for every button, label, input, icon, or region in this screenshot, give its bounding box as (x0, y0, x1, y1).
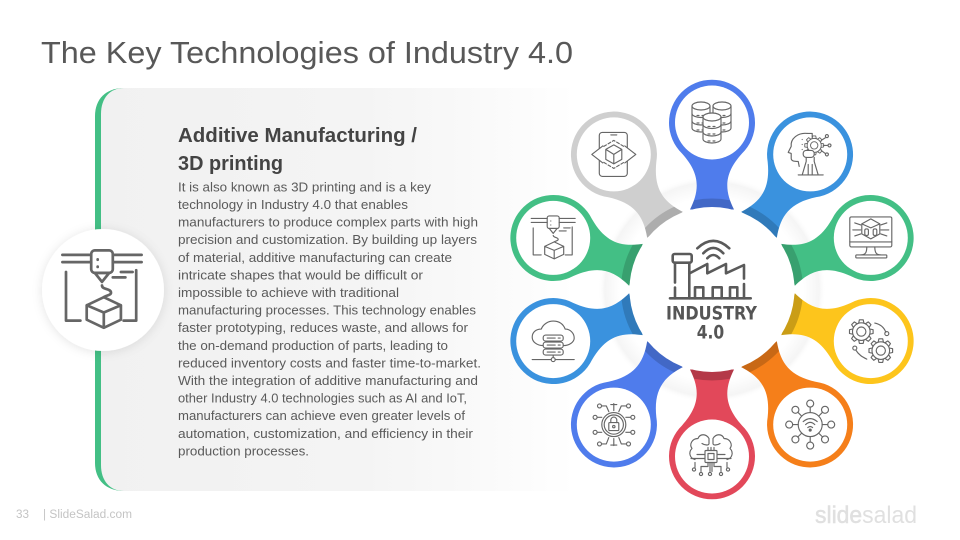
petal: digital twin (781, 195, 914, 286)
petal: automation gears (781, 293, 914, 384)
centre hub disc (630, 207, 794, 372)
panel body text: technology in Industry 4.0 that enables (178, 198, 408, 212)
petal: internet of things (741, 341, 854, 468)
panel body text: manufacturing processes. This technology enables (178, 304, 476, 318)
panel body text: of material, additive manufacturing can create (178, 251, 452, 265)
panel body text: reduced inventory costs and faster time-to-market. (178, 356, 481, 370)
panel grey body (101, 88, 575, 491)
icon: gears with process arrows (850, 320, 893, 362)
icon badge: 3D printer (42, 229, 164, 351)
petal: machine learning (669, 370, 755, 499)
icon: cloud server (532, 321, 574, 362)
icon: monitor with cube (850, 217, 892, 258)
petal: artificial intelligence (741, 112, 854, 238)
icon: databases (692, 102, 731, 143)
petal: cybersecurity (570, 341, 683, 468)
panel body text: production processes. (178, 444, 309, 458)
panel body text (178, 180, 481, 458)
hub label: INDUSTRY 4.0: 4.0 (697, 322, 724, 344)
panel body text: precision and customization. By building up layers (178, 233, 477, 247)
panel body text: other Industry 4.0 technologies such as AI and IoT, (178, 392, 467, 406)
panel body text: intricate shapes that would be difficult or (178, 268, 423, 282)
panel body text: impossible to achieve with traditional (178, 286, 399, 300)
icon: phone augmented reality cube (592, 132, 636, 176)
title: The Key Technologies of Industry 4.0 (41, 35, 573, 70)
panel green edge (95, 88, 124, 491)
petal inner white discs (516, 86, 908, 494)
panel body text: manufacturers can achieve even greater levels of (178, 409, 466, 423)
radial diagram: ten coloured petals (499, 80, 925, 499)
panel body text: automation, customization, and efficiency in their (178, 427, 473, 441)
footer: page number and site: 33 (16, 509, 29, 521)
icon: brain chip (690, 435, 732, 476)
panel heading: Additive Manufacturing / (178, 125, 417, 147)
petal: additive manufacturing (510, 195, 643, 286)
hub label: INDUSTRY 4.0 (666, 304, 758, 344)
panel body text: With the integration of additive manufacturing and (178, 374, 478, 388)
hub label: INDUSTRY 4.0: INDUSTRY (666, 304, 758, 324)
icon: wireless network hub (786, 400, 835, 449)
panel body text: the on-demand production of parts, leading to (178, 339, 448, 353)
panel: additive manufacturing description (95, 88, 575, 491)
petal: cloud computing (510, 293, 643, 384)
icon: AI head with gear (788, 133, 831, 175)
petal: augmented reality (571, 112, 683, 238)
hub halo (598, 176, 826, 404)
panel heading: 3D printing (178, 153, 283, 175)
panel body text: faster prototyping, reduces waste, and allows for (178, 321, 468, 335)
petal: data storage (669, 80, 755, 210)
footer: slidesalad logo: slidesalad (815, 502, 917, 529)
icon: circuit padlock (593, 404, 635, 446)
icon: factory with wifi (670, 241, 751, 298)
icon: 3D printer small (531, 216, 575, 259)
footer: page number and site: | SlideSalad.com (43, 509, 132, 521)
panel body text: manufacturers to produce complex parts with high (178, 216, 478, 230)
panel body text: It is also known as 3D printing and is a key (178, 180, 432, 194)
